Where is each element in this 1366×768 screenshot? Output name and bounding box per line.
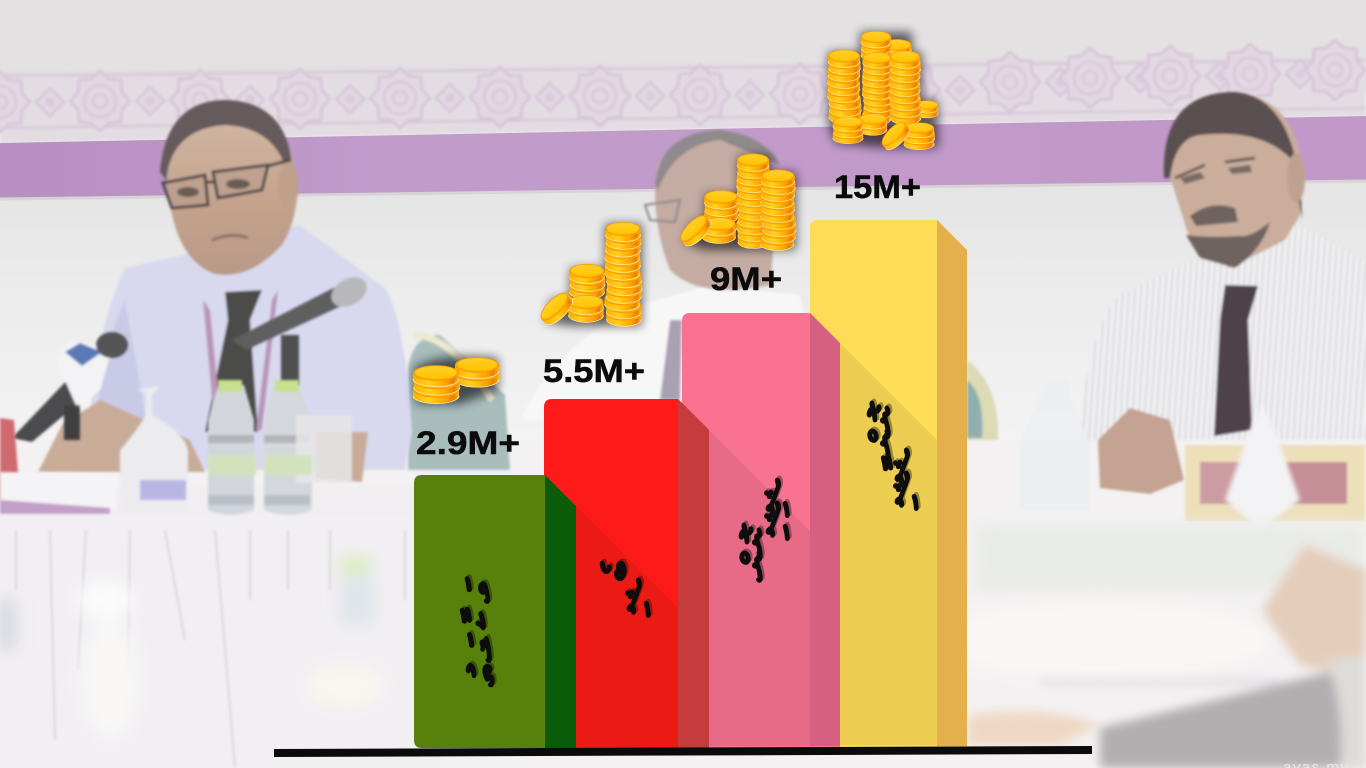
label: yellow bar: ން — [858, 422, 910, 465]
table skirt — [0, 516, 440, 768]
bar: green — [414, 475, 576, 748]
chair right — [967, 360, 998, 440]
microphones — [12, 271, 372, 442]
flower — [0, 418, 20, 500]
sanitizer foreground — [1225, 405, 1300, 530]
label: pink bar: ން — [730, 544, 782, 587]
purple band — [0, 116, 1366, 198]
label: yellow bar: ޝާ — [875, 440, 929, 490]
label: green bar: ތު — [460, 656, 508, 691]
label: pink bar: ނޮ — [730, 521, 782, 564]
baseline axis — [274, 746, 1092, 757]
wall below band — [0, 180, 1366, 440]
icon: coins 5.5M — [536, 222, 642, 329]
bar: pink — [682, 313, 840, 748]
label: green bar: ވަ — [456, 574, 504, 607]
person left — [38, 100, 412, 482]
label: green bar: ލަ — [457, 628, 507, 666]
label: red bar: ޝި — [607, 570, 662, 620]
tissue box — [1185, 445, 1365, 521]
label: red bar: ބެ — [594, 553, 642, 587]
icon: coins 9M — [676, 154, 796, 250]
label: red bar — [594, 553, 662, 620]
blurred foreground objects — [0, 525, 1365, 740]
ornamental frieze — [0, 40, 1366, 143]
upper wall — [0, 0, 1366, 90]
value: 9M+: 9M+ — [710, 261, 782, 297]
value: 15M+: 15M+ — [834, 169, 921, 205]
label: pink bar — [730, 470, 801, 587]
icon: coins 2.9M — [413, 356, 499, 404]
bar: red — [544, 399, 709, 748]
icon: coins 15M — [827, 31, 938, 153]
foreground blur: hand and sleeve — [968, 545, 1366, 768]
label: green bar: ކާ — [456, 604, 504, 636]
person centre — [520, 130, 820, 420]
value: 5.5M+: 5.5M+ — [543, 353, 645, 389]
value: 2.9M+: 2.9M+ — [416, 425, 520, 461]
person right — [1020, 92, 1366, 510]
bar: yellow — [810, 220, 967, 748]
label: yellow bar: ނޮ — [858, 399, 910, 442]
chart: stepped 3D bars — [414, 220, 967, 748]
label: yellow bar — [858, 399, 930, 513]
chair left — [408, 335, 510, 470]
label: green bar — [456, 574, 508, 691]
table with water bottles — [0, 380, 420, 518]
label: yellow bar: ޝި — [875, 463, 930, 513]
label: pink bar: ޝި — [746, 470, 801, 520]
label: pink bar: ޝި — [746, 493, 801, 543]
